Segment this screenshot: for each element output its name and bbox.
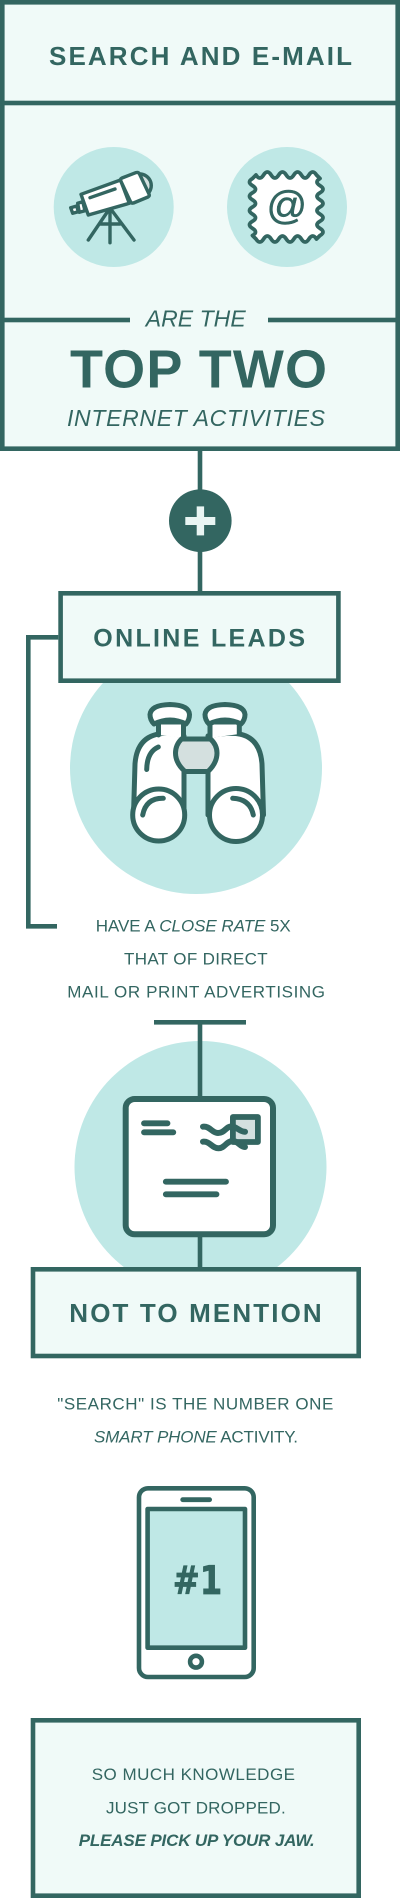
heading: top two: TOP TWO [70, 339, 327, 399]
icon: telescope [54, 147, 174, 267]
heading: search and e-mail: SEARCH AND E-MAIL [49, 41, 352, 71]
text: are the: ARE THE [144, 306, 246, 332]
icon: plus circle [169, 489, 232, 552]
icon: mail card [74, 1020, 326, 1293]
bracket: online leads to text [28, 637, 58, 926]
icon: smartphone with number one [139, 1488, 254, 1677]
text: so much knowledge: SO MUCH KNOWLEDGE [92, 1765, 295, 1784]
text: close rate: THAT OF DIRECT [124, 950, 268, 968]
text: search number one: "SEARCH" IS THE NUMBER ONE [57, 1394, 333, 1413]
panel: not to mention [33, 1269, 359, 1356]
icon: smartphone with number one: #1 [173, 1559, 222, 1604]
heading: not to mention: NOT TO MENTION [69, 1298, 322, 1328]
panel: search and e-mail [0, 2, 400, 449]
text: search number one: SMART PHONE ACTIVITY. [94, 1428, 298, 1447]
connector: top panel to online leads [198, 448, 202, 594]
text: close rate: HAVE A CLOSE RATE 5X [96, 916, 291, 935]
panel: online leads [61, 593, 338, 681]
heading: online leads: ONLINE LEADS [93, 624, 305, 652]
text: search number one [57, 1394, 333, 1447]
icon: binoculars [70, 642, 322, 894]
text: close rate: MAIL OR PRINT ADVERTISING [67, 982, 325, 1002]
text: close rate [67, 916, 325, 1002]
text: please pick up your jaw: PLEASE PICK UP YOUR JAW. [79, 1831, 315, 1850]
icon: e-mail stamp [227, 147, 347, 267]
text: just got dropped: JUST GOT DROPPED. [106, 1798, 286, 1817]
panel: closing remark [33, 1720, 359, 1896]
icon: e-mail stamp: @ [266, 184, 307, 228]
text: internet activities: INTERNET ACTIVITIES [67, 405, 326, 431]
